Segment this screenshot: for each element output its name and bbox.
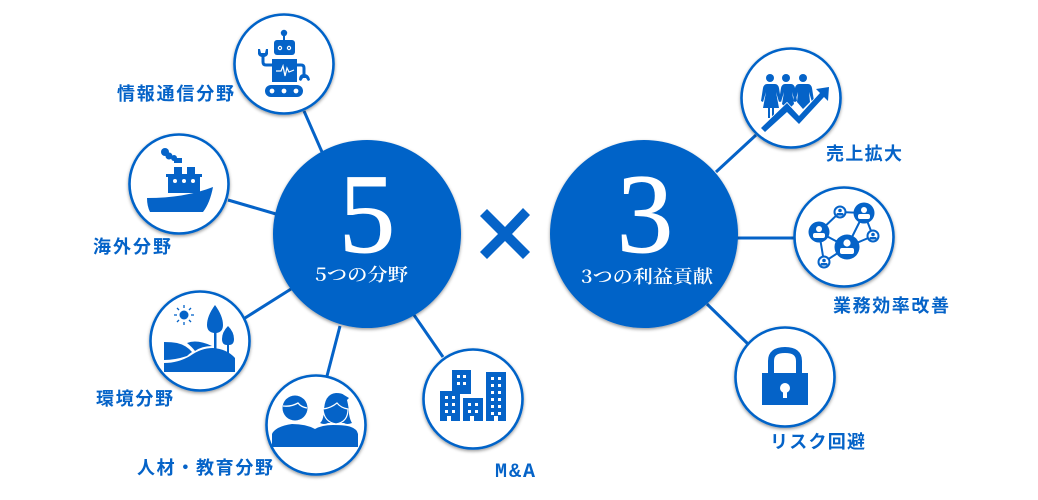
panel: 3 contributions hub — [550, 140, 738, 328]
icon: people with rising arrow — [761, 74, 829, 132]
panel: overseas — [130, 134, 228, 234]
label: operational efficiency: 業務効率改善 — [833, 296, 949, 316]
icon: ship — [147, 148, 213, 212]
panel: people and education — [266, 376, 366, 474]
label: overseas: 海外分野 — [93, 237, 171, 257]
icon: buildings — [440, 370, 506, 421]
label: risk avoidance: リスク回避 — [770, 432, 865, 452]
panel: sales expansion — [742, 48, 840, 148]
hub caption: 5 fields: 5つの分野 — [315, 261, 408, 287]
label: people and education: 人材・教育分野 — [137, 458, 273, 478]
label: environment: 環境分野 — [96, 389, 173, 409]
number 5: 5 — [339, 152, 395, 277]
icon: padlock — [762, 350, 808, 405]
number 3: 3 — [617, 152, 673, 277]
panel: operational efficiency — [794, 188, 894, 286]
icon: people network — [808, 202, 878, 268]
connector lines — [228, 111, 795, 376]
icon: landscape — [164, 305, 235, 372]
label: sales expansion: 売上拡大 — [826, 144, 902, 164]
label: M&A: M&A — [495, 461, 535, 484]
panel: environment — [150, 292, 250, 390]
panel: 5 fields hub — [273, 140, 461, 328]
icon: robot — [258, 30, 310, 97]
label: ICT: 情報通信分野 — [117, 84, 234, 104]
hub caption: 3 profit contributions: 3つの利益貢献 — [581, 263, 714, 289]
panel: M&A — [424, 350, 522, 448]
multiplication sign — [480, 208, 530, 259]
panel: ICT — [234, 14, 334, 114]
panel: risk avoidance — [736, 328, 834, 426]
icon: two people — [272, 393, 358, 447]
